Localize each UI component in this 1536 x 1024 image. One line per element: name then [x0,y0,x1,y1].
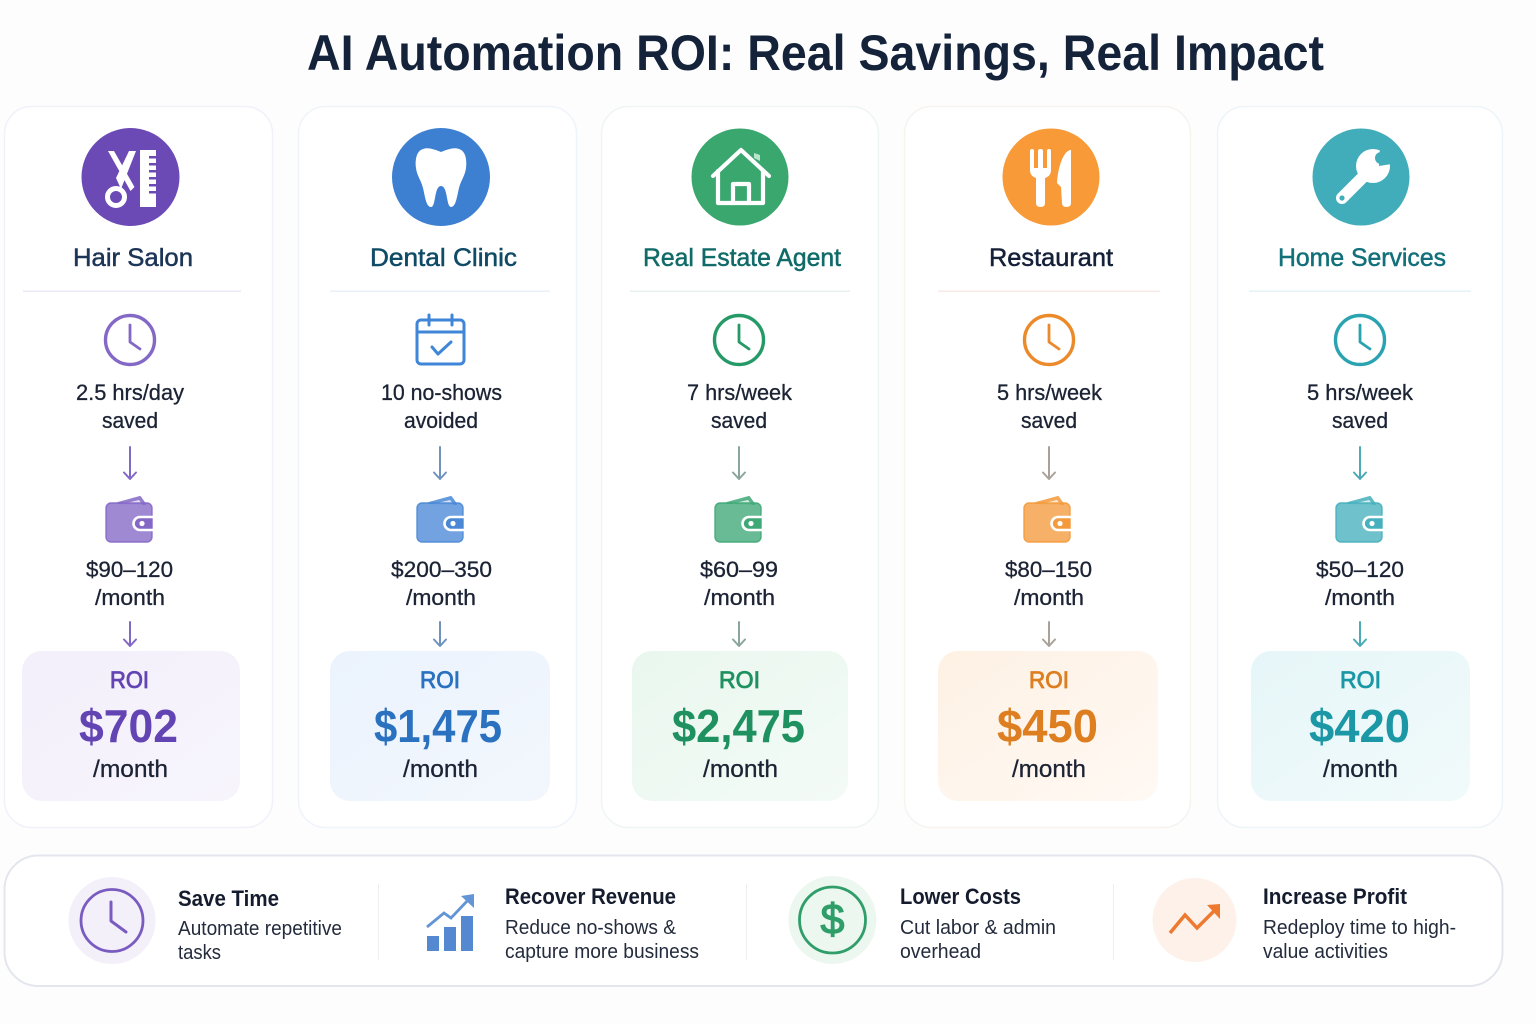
time saved: 7 hrs/week [687,380,793,405]
ROI box [1251,651,1470,801]
arrow [124,447,136,479]
monthly savings [86,557,173,610]
time saved [1307,380,1414,433]
arrow [124,622,136,646]
monthly savings: $90–120 [86,557,173,582]
no-shows avoided [381,380,502,433]
ROI box: ROI [1029,667,1069,694]
time saved [76,380,184,433]
icon: save time clock [68,877,156,964]
heading: dental clinic: Dental Clinic [370,244,517,272]
ROI box: $2,475 [672,700,805,752]
ROI box: /month [703,756,778,783]
time saved: 5 hrs/week [997,380,1103,405]
panel: dental clinic [298,106,576,828]
monthly savings: $200–350 [391,557,492,582]
arrow [1354,447,1366,479]
arrow [1354,622,1366,646]
panel: benefits strip [4,856,1502,986]
icon: increase profit arrow [1152,878,1236,962]
icon: clock [1024,316,1074,364]
heading: home services: Home Services [1278,244,1446,272]
ROI box: ROI [420,667,460,694]
ROI box: ROI [110,667,149,694]
panel: hair salon [4,106,272,828]
increase profit text [1263,884,1456,963]
no-shows avoided: 10 no-shows [381,380,502,405]
arrow [1043,447,1055,479]
monthly savings [391,557,492,610]
ROI box: $702 [79,700,178,752]
monthly savings: $80–150 [1005,557,1092,582]
ROI box: $450 [997,700,1098,752]
time saved: saved [1021,408,1077,433]
monthly savings: /month [95,585,165,610]
icon: wallet [106,497,154,542]
icon: clock [714,316,764,364]
ROI box: /month [1323,756,1398,783]
monthly savings [1005,557,1092,610]
ROI box [330,651,550,801]
lower costs text: overhead [900,941,981,963]
save time text: Save Time [178,886,279,911]
icon: recover revenue bar chart [427,894,474,951]
panel: home services [1218,106,1502,828]
icon: clock [1336,316,1384,364]
icon: scissors and comb [82,128,180,226]
time saved: 2.5 hrs/day [76,380,184,405]
ROI box: $420 [1309,700,1410,752]
panel: real estate agent [602,106,878,828]
save time text [178,886,342,964]
ROI box: $1,475 [374,700,502,752]
save time text: Automate repetitive [178,918,342,940]
monthly savings: /month [1325,585,1395,610]
monthly savings [1316,557,1404,610]
monthly savings: /month [704,585,775,610]
lower costs text [900,884,1056,963]
icon: fork and knife [1002,128,1100,226]
icon: lower costs dollar [788,876,876,964]
heading: restaurant: Restaurant [989,244,1113,272]
arrow [434,622,446,646]
arrow [434,447,446,479]
no-shows avoided: avoided [404,408,478,433]
icon: clock [106,316,154,364]
recover revenue text: Reduce no-shows & [505,917,677,939]
time saved: saved [102,408,158,433]
recover revenue text: capture more business [505,941,699,963]
time saved: saved [711,408,767,433]
increase profit text: Redeploy time to high- [1263,917,1456,939]
monthly savings: $50–120 [1316,557,1404,582]
lower costs text: Lower Costs [900,884,1021,909]
monthly savings [700,557,778,610]
arrow [1043,622,1055,646]
panel: restaurant [904,106,1190,828]
arrow [733,622,745,646]
icon: wallet [417,497,465,542]
heading: hair salon: Hair Salon [73,244,193,272]
title: AI Automation ROI: Real Savings, Real Impact [307,25,1324,81]
time saved: saved [1332,408,1388,433]
monthly savings: $60–99 [700,557,778,582]
icon: house [692,128,788,226]
icon: calendar check [417,315,464,364]
icon: lower costs dollar: $ [821,896,845,944]
increase profit text: value activities [1263,941,1388,963]
time saved [997,380,1103,433]
recover revenue text: Recover Revenue [505,884,676,909]
recover revenue text [505,884,699,963]
arrow [733,447,745,479]
icon: tooth [392,128,490,226]
ROI box: ROI [719,667,760,694]
ROI box [632,651,848,801]
monthly savings: /month [1014,585,1084,610]
icon: wallet [1024,497,1072,542]
icon: wallet [1336,497,1384,542]
icon: wallet [715,497,763,542]
monthly savings: /month [406,585,476,610]
ROI box [22,651,240,801]
time saved: 5 hrs/week [1307,380,1414,405]
save time text: tasks [178,942,221,964]
icon: wrench [1312,128,1410,226]
ROI box: ROI [1340,667,1381,694]
ROI box: /month [403,756,478,783]
ROI box: /month [1012,756,1086,783]
ROI box [938,651,1158,801]
increase profit text: Increase Profit [1263,884,1408,909]
lower costs text: Cut labor & admin [900,917,1056,939]
time saved [687,380,793,433]
heading: real estate agent: Real Estate Agent [643,244,841,272]
ROI box: /month [93,756,168,783]
